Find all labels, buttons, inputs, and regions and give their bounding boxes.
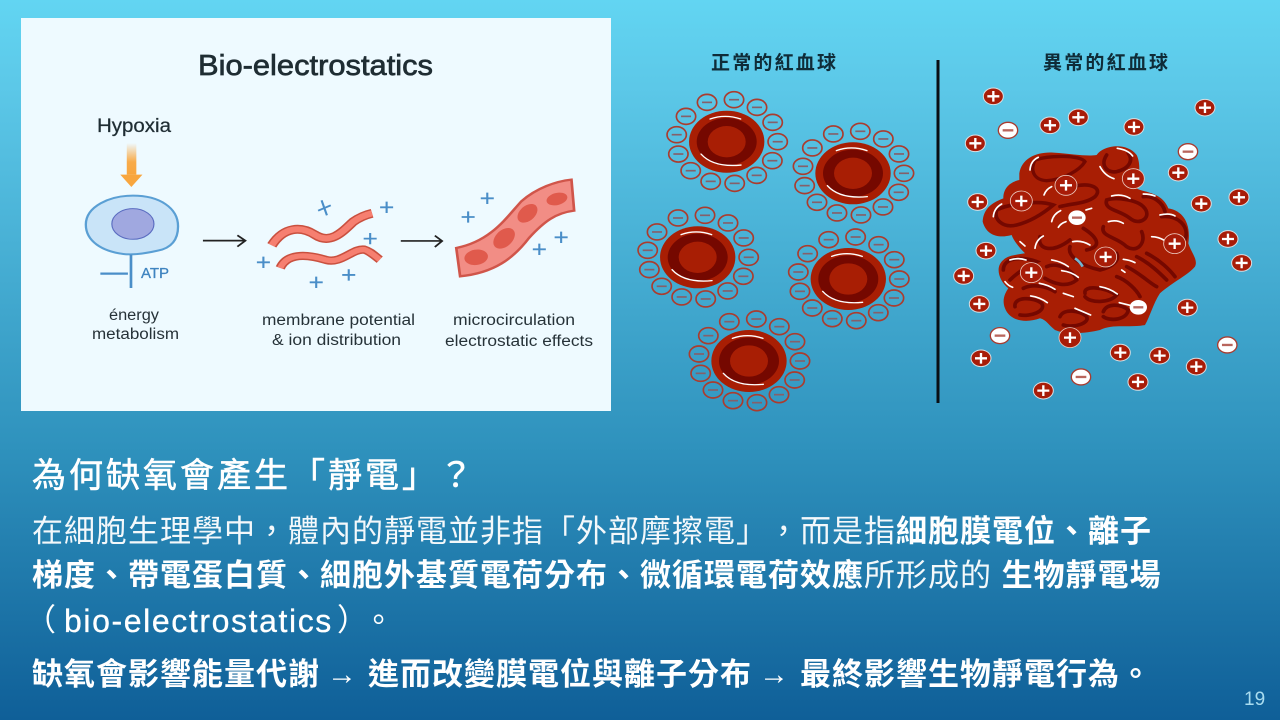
- label: membrane potential: & ion distribution: [272, 332, 401, 349]
- arrow: metabolism to membrane: [203, 235, 245, 247]
- label: ATP: ATP: [141, 266, 169, 282]
- text block: explanation line 3: 。: [363, 603, 394, 638]
- icon: cell with ATP stem: [86, 196, 178, 288]
- text block: explanation line 2: 梯度、帶電蛋白質、細胞外基質電荷分布、微循環電荷效應所形成的 生物靜電場: [32, 558, 1162, 593]
- icon: normal cell 5: [689, 311, 810, 411]
- icon: normal cell 4: [789, 229, 909, 329]
- icon: positive charges around membrane: [257, 200, 393, 288]
- label: Hypoxia: Hypoxia: [97, 116, 171, 137]
- text block: explanation line 3: （: [25, 603, 56, 638]
- icon: positive charges: [954, 88, 1252, 399]
- arrow: membrane to microcirculation: [401, 236, 442, 247]
- text block: explanation line 3: ）: [337, 603, 368, 638]
- icon: normal cell 3: [638, 207, 758, 307]
- label: energy metabolism: metabolism: [92, 326, 179, 343]
- callout: causal chain: 進而改變膜電位與離子分布: [368, 657, 752, 692]
- label: microcirculation: electrostatic effects: [445, 333, 593, 350]
- icon: normal cell 1: [667, 92, 787, 191]
- heading: normal RBC: 正常的紅血球: [711, 52, 838, 74]
- callout: causal chain: 缺氧會影響能量代謝: [32, 657, 320, 692]
- panel: normal red blood cells: [638, 52, 914, 411]
- label: energy metabolism: énergy: [109, 307, 159, 324]
- text block: explanation line 1: 在細胞生理學中，體內的靜電並非指「外部摩擦電」，而是指細胞膜電位、離子: [32, 514, 1152, 549]
- text block: explanation line 3: bio-electrostatics: [64, 603, 333, 639]
- panel title: Bio-electrostatics: [198, 50, 433, 82]
- chart: clumped cell cluster with charges: [954, 88, 1252, 399]
- icon: hypoxia arrow: [120, 143, 142, 187]
- callout: causal chain: →: [327, 658, 357, 691]
- callout: causal chain: 最終影響生物靜電行為。: [800, 657, 1152, 692]
- label: energy metabolism: [92, 307, 179, 343]
- icon: normal cell 2: [793, 123, 914, 223]
- panel: Bio-electrostatics: [21, 18, 611, 411]
- page number: 19: [1244, 689, 1265, 710]
- icon: negative charges: [990, 122, 1237, 385]
- panel: abnormal red blood cells: [954, 52, 1252, 399]
- callout: causal chain: [32, 657, 1152, 692]
- label: microcirculation: [445, 312, 593, 350]
- icon: cluster body: [983, 146, 1196, 333]
- label: microcirculation: microcirculation: [453, 312, 575, 329]
- callout: causal chain: →: [759, 658, 789, 691]
- label: membrane potential: membrane potential: [262, 312, 415, 329]
- heading: why hypoxia generates static: 為何缺氧會產生「靜電」？: [32, 457, 476, 495]
- icon: membrane strands: [272, 213, 380, 268]
- icon: blood vessel: [456, 180, 574, 276]
- heading: abnormal RBC: 異常的紅血球: [1043, 52, 1170, 74]
- label: membrane potential: [262, 312, 415, 349]
